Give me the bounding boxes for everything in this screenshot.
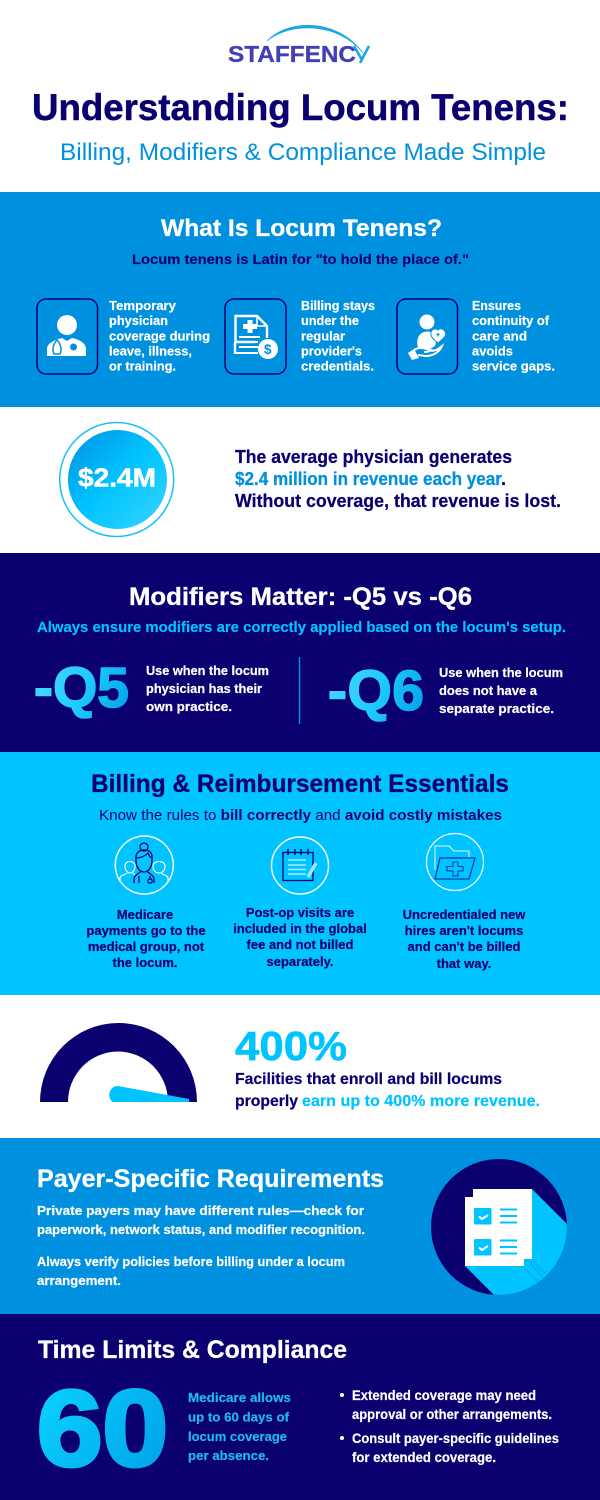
text: continuity: Ensures [472, 298, 521, 313]
text: billing credentials: regular [301, 328, 345, 344]
panel: time limits [0, 1314, 600, 1500]
text: billing credentials: Billing stays [301, 298, 375, 313]
icon: hand holding patient [397, 299, 458, 374]
text: temporary coverage: or training. [109, 358, 176, 374]
text: temporary coverage: physician [109, 313, 168, 328]
heading: Time Limits & Compliance [38, 1336, 347, 1364]
badge: $2.4M [60, 422, 174, 536]
heading: Billing & Reimbursement Essentials [91, 770, 509, 798]
title: Understanding Locum Tenens: [32, 87, 569, 128]
icon: folder [426, 834, 484, 890]
text: uncredentialed: Uncredentialed new [403, 907, 526, 922]
text: continuity: service gaps. [472, 358, 555, 374]
logo: STAFFENC [228, 41, 356, 67]
text: uncredentialed: that way. [437, 956, 491, 971]
panel: revenue stat [60, 422, 561, 536]
bullet list: approval or other arrangements. [352, 1407, 552, 1422]
modifier -Q5: Use when the locum [146, 663, 269, 678]
text: uncredentialed: and can't be billed [408, 939, 521, 954]
text: billing credentials: under the [301, 313, 359, 328]
bullet list: Consult payer-specific guidelines [352, 1431, 559, 1446]
gauge [40, 1023, 197, 1102]
panel: 400 percent [40, 1023, 540, 1110]
revenue text: Facilities that enroll and bill locums [235, 1071, 502, 1088]
text: temporary coverage: leave, illness, [109, 344, 192, 358]
panel: payer-specific requirements [0, 1138, 600, 1314]
text: continuity: avoids [472, 344, 513, 358]
modifier -Q5: own practice. [146, 699, 232, 714]
header [32, 25, 569, 166]
text: billing credentials: provider's [301, 344, 362, 358]
body text: paperwork, network status, and modifier recognition. [37, 1222, 365, 1237]
subheading: Always ensure modifiers are correctly applied based on the locum's setup. [37, 620, 566, 636]
definition: Locum tenens is Latin for "to hold the place of." [132, 251, 469, 267]
revenue text: Without coverage, that revenue is lost. [235, 491, 561, 511]
bullet list [340, 1388, 559, 1465]
subtitle: Billing, Modifiers & Compliance Made Simple [60, 139, 546, 166]
modifier -Q6: Use when the locum [439, 665, 563, 680]
bullet list: for extended coverage. [352, 1450, 496, 1465]
text: continuity: care and [472, 328, 527, 344]
medicare text: per absence. [188, 1448, 269, 1463]
modifier -Q6: does not have a [439, 683, 538, 698]
medicare text: locum coverage [188, 1429, 287, 1444]
text: post-op: separately. [267, 954, 333, 969]
icon: notepad [272, 837, 328, 894]
text: uncredentialed: hires aren't locums [405, 923, 523, 938]
modifier -Q5 [34, 656, 269, 720]
stat: 60: 60 [37, 1368, 168, 1488]
icon: medical group [115, 836, 173, 894]
heading: Payer-Specific Requirements [37, 1165, 384, 1193]
text: temporary coverage: coverage during [109, 328, 210, 344]
modifier -Q6: -Q6 [328, 659, 424, 723]
modifier -Q5: -Q5 [34, 656, 129, 720]
modifier -Q6: separate practice. [439, 701, 554, 716]
stat: 400%: 400% [235, 1023, 347, 1069]
revenue text: . [501, 469, 506, 489]
heading: What Is Locum Tenens? [161, 215, 442, 242]
text: medicare payments: the locum. [112, 955, 178, 970]
medicare text: Medicare allows [188, 1390, 291, 1405]
body text: Always verify policies before billing under a locum [37, 1254, 345, 1269]
text: post-op: fee and not billed [247, 937, 354, 952]
text: post-op: included in the global [233, 921, 367, 936]
icon: doctor [37, 299, 98, 374]
heading: Modifiers Matter: -Q5 vs -Q6 [129, 583, 472, 611]
logo [228, 25, 369, 67]
text: medicare payments: Medicare [117, 907, 173, 922]
body text: Private payers may have different rules—check for [37, 1203, 364, 1218]
text: medicare payments: medical group, not [88, 939, 205, 954]
revenue text: properly [235, 1093, 298, 1110]
subheading: Know the rules to bill correctly and avoid costly mistakes [99, 807, 502, 824]
medicare text: up to 60 days of [188, 1410, 290, 1424]
icon: billing document: $ [264, 342, 272, 357]
text: continuity: continuity of [472, 313, 550, 328]
body text: arrangement. [37, 1273, 121, 1288]
modifier -Q6 [328, 659, 563, 723]
bullet list: Extended coverage may need [352, 1388, 536, 1403]
revenue text: The average physician generates [235, 447, 512, 467]
text: temporary coverage: Temporary [109, 298, 177, 313]
modifier -Q5: physician has their [146, 681, 262, 696]
panel: what is locum tenens [0, 192, 600, 407]
text: billing credentials: credentials. [301, 358, 374, 374]
icon: checklist [431, 1159, 567, 1295]
icon: billing document [225, 299, 286, 374]
text: medicare payments: payments go to the [86, 923, 206, 938]
panel: billing essentials [0, 752, 600, 995]
revenue text: $2.4 million in revenue each year [235, 469, 502, 489]
panel: modifiers [0, 553, 600, 752]
badge: $2.4M: $2.4M [78, 462, 156, 492]
text: post-op: Post-op visits are [246, 905, 354, 920]
revenue text: earn up to 400% more revenue. [302, 1093, 540, 1110]
